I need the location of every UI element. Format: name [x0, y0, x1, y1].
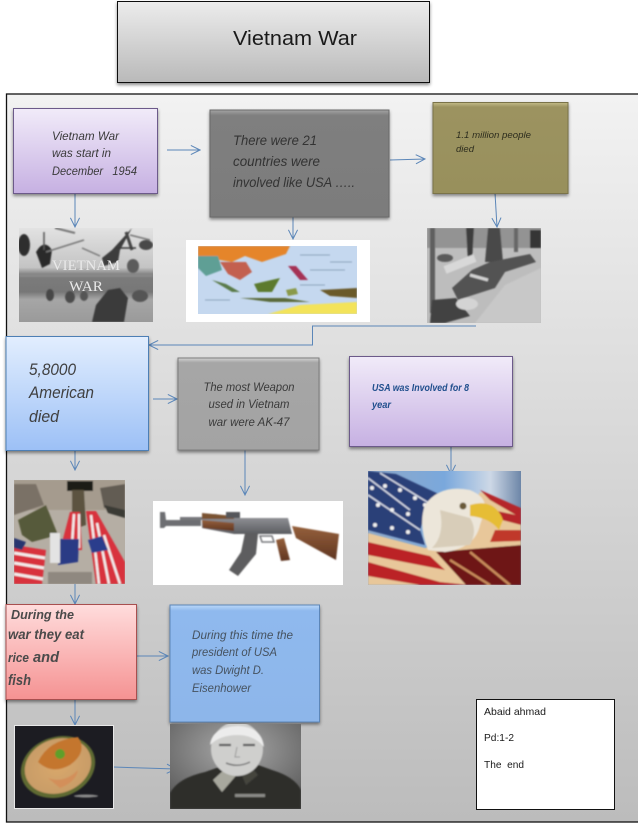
box: 21 countries: involved like USA …..	[233, 174, 355, 190]
box: most used weapon: war were AK-47	[208, 417, 290, 429]
box: president Eisenhower: president of USA	[191, 647, 277, 659]
photo: Vietnam War helicopters: WAR	[69, 279, 103, 295]
box: 58,000 American died: 5,8000	[29, 361, 77, 379]
title box: Vietnam War	[233, 27, 357, 50]
photo: rice and fish dish	[12, 726, 114, 808]
box: 1.1 million: 1.1 million people	[456, 130, 531, 140]
box: rice and fish: fish	[8, 672, 31, 689]
box: USA involved 8 years: USA was Involved for 8	[372, 382, 469, 394]
title box	[118, 2, 430, 82]
box: president Eisenhower: Eisenhower	[192, 683, 252, 695]
box: rice and fish: war they eat	[8, 627, 84, 642]
box: Vietnam War start: was start in	[52, 148, 111, 160]
box: most used weapon: used in Vietnam	[208, 399, 290, 411]
box: Vietnam War start	[14, 108, 158, 194]
box: president Eisenhower	[170, 605, 320, 722]
photo: AK-47 rifle	[153, 501, 343, 585]
box: rice and fish: During the	[11, 607, 74, 622]
box: USA involved 8 years: year	[371, 399, 392, 411]
box: USA involved 8 years	[350, 356, 512, 446]
connector arrows	[75, 150, 497, 769]
box: 21 countries: countries were	[233, 153, 320, 169]
box: president Eisenhower: was Dwight D.	[192, 665, 264, 677]
box: author credit: Abaid ahmad	[484, 706, 546, 718]
box: most used weapon: The most Weapon	[204, 382, 294, 394]
box: author credit	[476, 700, 614, 810]
box: rice and fish: rice	[8, 650, 29, 665]
photo: Vietnam War helicopters	[18, 228, 153, 322]
box: president Eisenhower: During this time the	[192, 630, 293, 642]
box: Vietnam War start: Vietnam War	[52, 131, 120, 143]
box: 58,000 American died: died	[29, 408, 60, 426]
box: author credit: The end	[484, 759, 524, 771]
photo: war casualties	[427, 228, 541, 323]
box: 1.1 million	[433, 102, 568, 194]
box: rice and fish: and	[33, 649, 60, 666]
box: author credit: Pd:1-2	[484, 732, 514, 744]
box: 21 countries: There were 21	[233, 132, 317, 148]
box: Vietnam War start: December 1954	[52, 166, 137, 178]
box: most used weapon	[178, 358, 319, 450]
box: 58,000 American died: American	[28, 384, 94, 402]
photo: bald eagle and American flag	[368, 471, 521, 585]
photo: flag-draped coffins	[14, 480, 125, 584]
box: 1.1 million: died	[456, 144, 475, 154]
photo: Dwight D. Eisenhower portrait	[170, 722, 301, 809]
photo: Vietnam War helicopters: VIETNAM	[52, 258, 120, 274]
box: 58,000 American died	[6, 336, 148, 450]
photo: map of Southeast Asia	[186, 240, 370, 322]
box: rice and fish	[6, 604, 136, 700]
box: 21 countries	[210, 110, 389, 217]
